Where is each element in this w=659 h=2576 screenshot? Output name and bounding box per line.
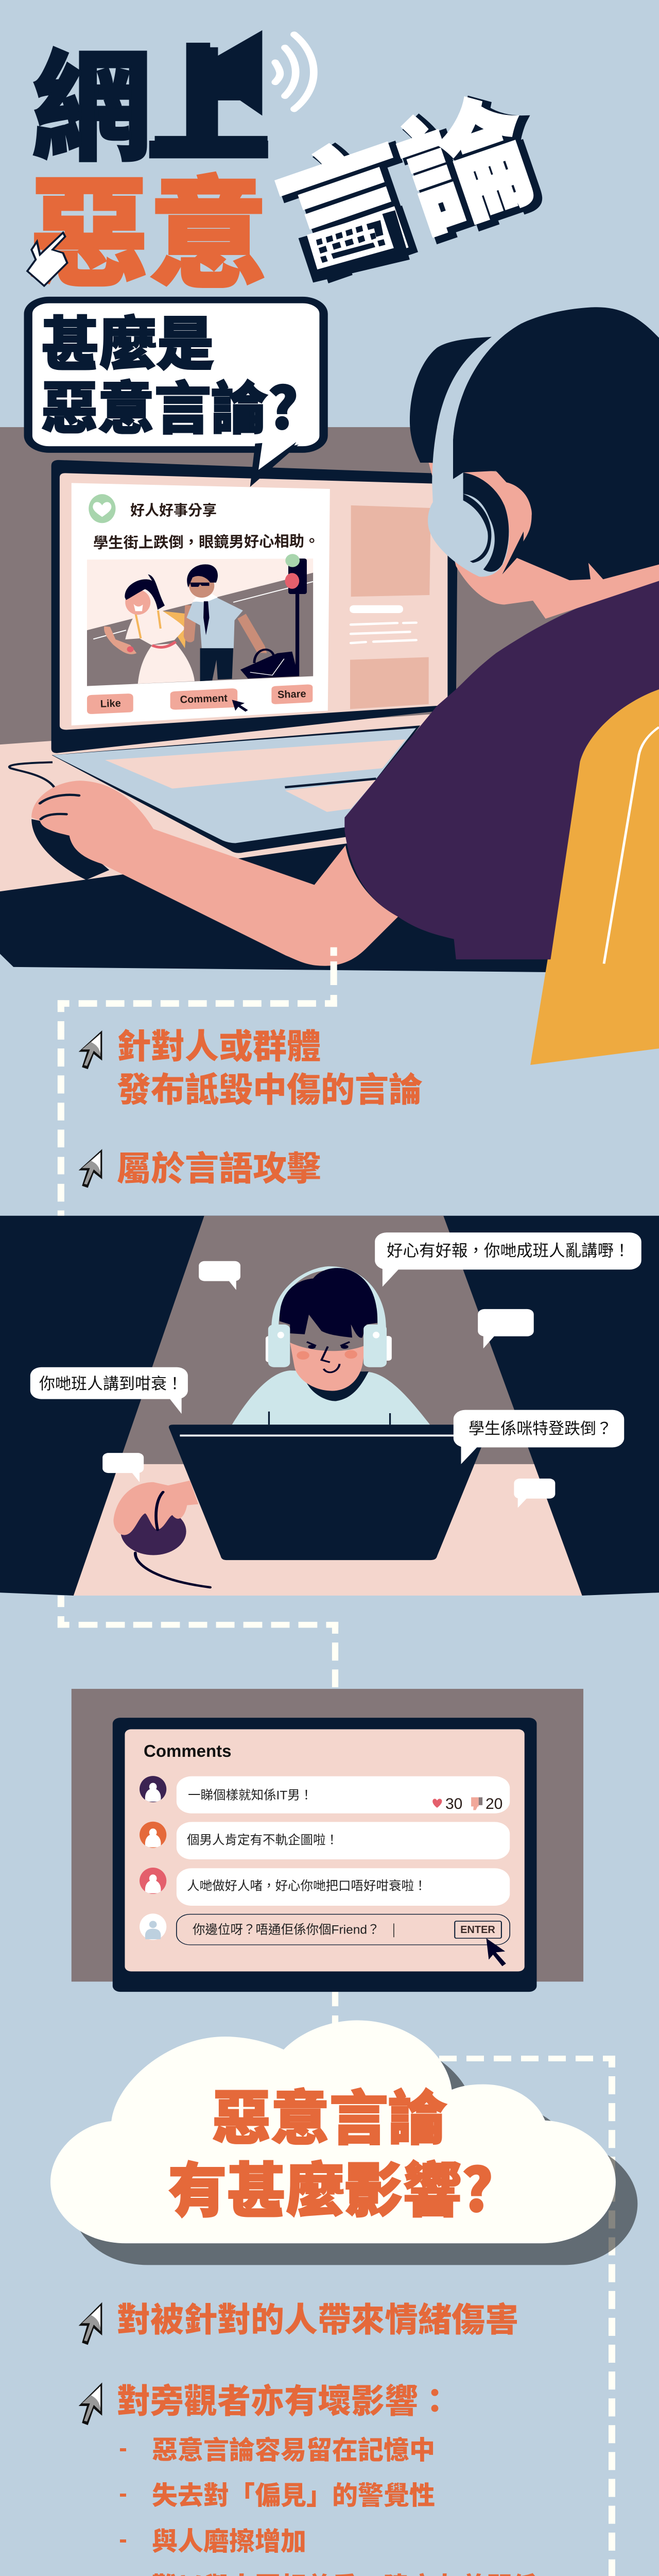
comment text: 個男人肯定有不軌企圖啦！: [187, 1833, 338, 1848]
screen text: [93, 502, 319, 710]
dashed connector: [58, 947, 337, 1031]
title: [29, 11, 562, 311]
icon: speaker: [210, 30, 262, 115]
speech bubble: 甚麼是惡意言論: [28, 300, 324, 487]
bubble text: 學生係咪特登跌倒？: [469, 1420, 612, 1437]
bubble heading: [41, 298, 298, 445]
backdrop: [72, 1689, 583, 1981]
dashed connector: right side: [439, 2056, 615, 2576]
title line: 網上: 網上: [32, 11, 271, 184]
illustration: person at laptop: [0, 307, 659, 1065]
panel: online attacker: [0, 1216, 659, 1596]
post author: 好人好事分享: [130, 502, 217, 518]
panel: definition: 屬於言語攻擊: [117, 1141, 321, 1191]
text: definition lines: 針對人或群體: [117, 1019, 321, 1069]
list items: [120, 2430, 538, 2576]
comment text: 人哋做好人啫，好心你哋把口唔好咁衰啦！: [187, 1878, 426, 1893]
bubble heading: 惡意言論?: [41, 363, 298, 445]
icon: sound waves: [275, 35, 314, 109]
panel: impact: [50, 2020, 637, 2576]
list items: 惡意言論容易留在記憶中: [152, 2430, 435, 2467]
hand on mouse: [113, 1481, 210, 1587]
post photo: [87, 554, 313, 686]
desk front: [0, 811, 588, 973]
list items: 與人磨擦增加: [152, 2521, 306, 2558]
spotlight: [74, 1216, 582, 1596]
button: Like: [87, 693, 133, 714]
comment input text: 你邊位呀？唔通佢係你個Friend？: [193, 1923, 379, 1937]
icon: pointer hand: [27, 233, 67, 286]
avatar: [140, 1776, 166, 1802]
comment input: [177, 1914, 510, 1945]
button: Comment: [170, 688, 237, 710]
post headline: 學生街上跌倒，眼鏡男好心相助。: [93, 533, 319, 552]
person shirt: [344, 581, 659, 959]
desk: [0, 709, 505, 891]
avatar: [140, 1913, 166, 1940]
dislike count: 20: [485, 1795, 502, 1812]
上 reinforcement strokes: [149, 43, 268, 158]
dashed connector: [58, 1596, 338, 2029]
traffic light: [296, 594, 299, 676]
heading: Comments: Comments: [144, 1741, 232, 1760]
panel: definition: 發布詆毀中傷的言論: [117, 1062, 423, 1112]
speech bubbles: [30, 1232, 641, 1508]
girl: [158, 611, 187, 648]
title line: 惡意: 惡意: [29, 138, 268, 311]
panel: definition: [58, 1019, 423, 1217]
dark backdrop: [0, 1216, 659, 1596]
bubble text: 好心有好報，你哋成班人亂講嘢！: [387, 1241, 630, 1260]
cloud heading: 有甚麼影響?: [168, 2143, 493, 2228]
icon: heart: [432, 1799, 442, 1808]
person arm and hand: [9, 762, 398, 966]
list items: 失去對「偏見」的警覺性: [152, 2475, 435, 2512]
icon: keyboard: [299, 210, 410, 282]
text: effect: 對旁觀者亦有壞影響：: [117, 2374, 452, 2422]
cloud heading: 惡意言論: [212, 2071, 447, 2156]
enter label: ENTER: [460, 1924, 495, 1936]
icon: thumbs down: [471, 1798, 482, 1810]
icon: cursor: [232, 700, 248, 711]
icon: heart badge: [89, 494, 115, 523]
person head and headphones: [410, 307, 659, 619]
avatar: [140, 1822, 166, 1848]
boy: [184, 605, 197, 642]
title line: 言論 shadow: 言論: [258, 49, 562, 309]
bubble heading: 甚麼是: [41, 298, 214, 381]
avatar: [140, 1868, 166, 1894]
monitor: [113, 1718, 536, 1992]
button: Share: [271, 684, 313, 704]
chair: [530, 689, 659, 1065]
text: effect: 對被針對的人帶來情緒傷害: [117, 2293, 518, 2341]
laptop back: [169, 1425, 489, 1560]
icon: cursor: [486, 1938, 506, 1966]
comment text: 一睇個樣就知係IT男！: [188, 1788, 313, 1802]
like count: 30: [445, 1795, 462, 1812]
bubble text: 你哋班人講到咁衰！: [39, 1375, 183, 1393]
wall: [0, 427, 659, 745]
laptop base: [51, 725, 420, 853]
boy with headphones: [232, 1266, 430, 1425]
Share label: Share: [278, 688, 306, 701]
title line: 言論 shadow: 言論: [252, 46, 556, 307]
laptop screen: [51, 460, 458, 753]
Comment label: Comment: [180, 692, 228, 706]
panel: comments: [58, 1596, 583, 2029]
comment bubbles: [177, 1776, 510, 1906]
Like label: Like: [100, 698, 121, 710]
cloud: [50, 2020, 637, 2425]
